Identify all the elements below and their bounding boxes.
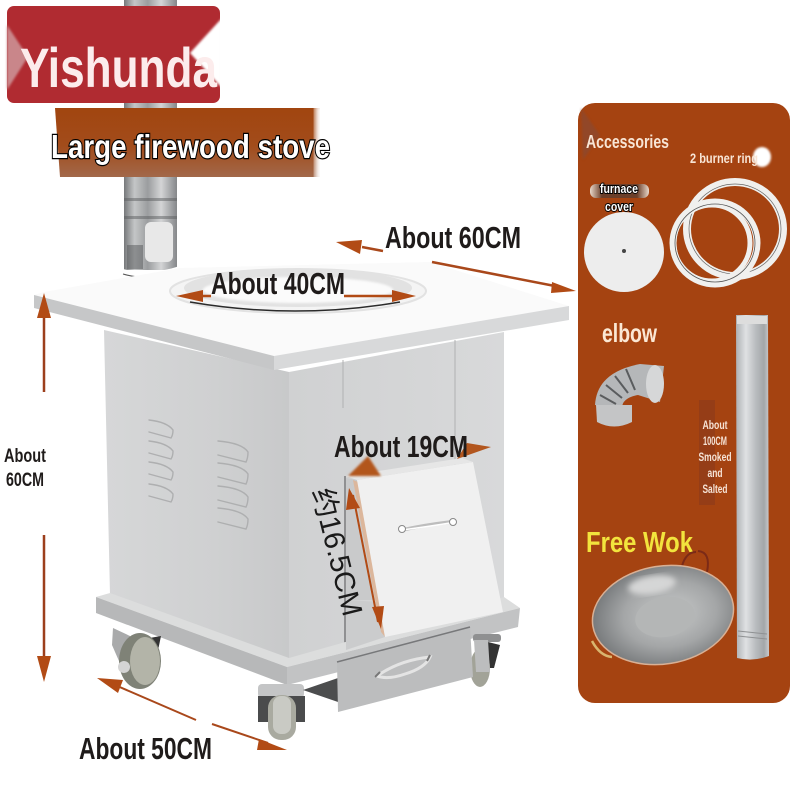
burner rings bbox=[673, 182, 783, 284]
right vents bbox=[218, 441, 248, 529]
under shadow bbox=[303, 678, 338, 702]
dark opening line bbox=[344, 476, 346, 650]
dimension: door width 19 cm bbox=[334, 429, 491, 476]
smoke pipe length label: About bbox=[702, 418, 728, 432]
front caster bbox=[258, 684, 305, 740]
smoke pipe length label: Salted bbox=[702, 482, 728, 496]
brand badge bbox=[7, 6, 222, 103]
lower drawer bbox=[337, 627, 473, 712]
dimension: base depth 50 cm: About 50CM bbox=[79, 731, 212, 766]
free wok label: Free Wok bbox=[586, 527, 694, 559]
smoke pipe bbox=[736, 315, 769, 660]
panel: accessories bbox=[578, 103, 790, 703]
dimension: door width 19 cm: About 19CM bbox=[334, 429, 468, 464]
dimension: height 60 cm: 60CM bbox=[6, 470, 44, 491]
burner ring label: 2 burner ring bbox=[690, 150, 758, 166]
stove body right face bbox=[289, 332, 504, 660]
back-left caster bbox=[112, 628, 161, 689]
wok bbox=[585, 551, 741, 675]
dimension: top width 60 cm: About 60CM bbox=[385, 220, 521, 255]
subtitle band bbox=[51, 104, 330, 182]
dimension: opening 40 cm: About 40CM bbox=[211, 266, 345, 301]
right caster bbox=[470, 634, 501, 687]
door side edge bbox=[346, 478, 380, 600]
furnace cover disc bbox=[584, 212, 664, 292]
left vents bbox=[149, 420, 173, 502]
icon: elbow pipe bbox=[595, 364, 664, 426]
stove top burner ring bbox=[170, 269, 426, 313]
base plate bbox=[96, 593, 520, 685]
dimension: height 60 cm bbox=[4, 293, 51, 682]
smoke pipe length label: 100CM bbox=[703, 434, 727, 448]
tabletop bbox=[34, 262, 569, 370]
brand name: Yishunda bbox=[20, 36, 218, 99]
dimension: top width 60 cm bbox=[336, 220, 576, 293]
dimension: height 60 cm: About bbox=[4, 446, 47, 467]
smoke pipe length label: and bbox=[708, 466, 722, 480]
elbow label: elbow bbox=[602, 318, 658, 348]
dimension: door height 16.5 cm: 约16.5CM bbox=[305, 485, 369, 619]
chimney pipe bbox=[123, 0, 180, 277]
furnace cover label bbox=[590, 181, 649, 214]
accessories heading: Accessories bbox=[586, 132, 669, 152]
door seams bbox=[343, 340, 455, 600]
smoke pipe length label bbox=[698, 400, 732, 505]
stove body left face bbox=[104, 330, 289, 660]
smoke pipe length label: Smoked bbox=[698, 450, 732, 464]
furnace cover label: furnace bbox=[600, 181, 638, 196]
stove illustration bbox=[34, 262, 569, 740]
subtitle: Large firewood stove bbox=[51, 128, 330, 165]
pull-out door bbox=[346, 458, 503, 637]
furnace cover label: cover bbox=[605, 199, 633, 214]
dimension: base depth 50 cm bbox=[79, 678, 287, 766]
